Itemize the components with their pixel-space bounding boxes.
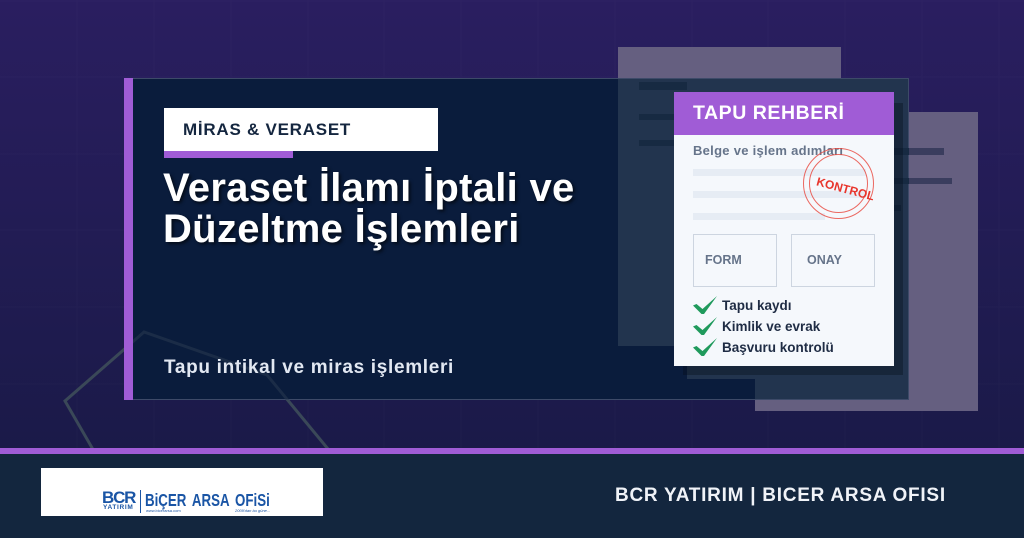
middle document seen through panel <box>687 79 908 379</box>
main title <box>163 166 576 254</box>
card heading: TAPU REHBERİ <box>693 102 844 124</box>
placeholder line 1 <box>693 169 866 176</box>
back document left <box>618 47 841 346</box>
form box: FORM <box>705 253 742 267</box>
check text: Başvuru kontrolü <box>722 340 834 355</box>
placeholder line 3 <box>693 213 825 220</box>
stamp <box>803 148 876 219</box>
check item 3 <box>693 338 834 356</box>
label box <box>164 108 438 151</box>
check item 1 <box>693 296 792 314</box>
pentagon seen through panel <box>133 330 290 400</box>
icon: check <box>693 317 717 335</box>
logo slogan: 2009'dan bu güne... <box>235 508 270 513</box>
document right seen through panel <box>755 112 908 399</box>
check text: Kimlik ve evrak <box>722 319 820 334</box>
logo website: www.bicerarsa.com <box>146 508 181 513</box>
card shadow <box>683 103 903 375</box>
card header <box>674 92 894 135</box>
document right line 2 <box>880 178 952 184</box>
back document right <box>755 112 978 411</box>
approval box: ONAY <box>807 253 842 267</box>
document left line 2 <box>639 114 679 120</box>
purple accent bar <box>124 78 133 400</box>
guide card <box>674 92 894 366</box>
logo box <box>41 468 323 516</box>
placeholder line 2 <box>693 191 866 198</box>
footer brand text: BCR YATIRIM | BICER ARSA OFISI <box>615 485 946 506</box>
subtitle: Tapu intikal ve miras işlemleri <box>164 357 454 378</box>
document left seen through panel <box>618 79 841 346</box>
main dark panel <box>124 78 909 400</box>
icon: check <box>693 338 717 356</box>
logo BCR: BCR <box>102 488 135 507</box>
document left line 3 <box>639 140 679 146</box>
icon: check <box>693 296 717 314</box>
main title: Düzeltme İşlemleri <box>163 207 520 251</box>
footer <box>0 448 1024 538</box>
decorative pentagon outline <box>63 348 329 448</box>
approval box <box>791 234 875 287</box>
document left line 1 <box>639 82 687 90</box>
check item 2 <box>693 317 820 335</box>
stamp: KONTROL <box>815 175 876 203</box>
main title: Veraset İlamı İptali ve <box>163 166 575 210</box>
footer accent line <box>0 448 1024 454</box>
form box <box>693 234 777 287</box>
document right line 3 <box>880 205 901 211</box>
check text: Tapu kaydı <box>722 298 792 313</box>
logo YATIRIM: YATIRIM <box>103 504 134 511</box>
label underline <box>164 151 293 158</box>
document right line 1 <box>880 148 944 155</box>
logo divider <box>140 490 141 513</box>
label text: MİRAS & VERASET <box>183 120 351 139</box>
category label <box>164 108 438 158</box>
logo name: BiÇER ARSA OFiSi <box>145 490 270 510</box>
card subheading: Belge ve işlem adımları <box>693 143 843 158</box>
